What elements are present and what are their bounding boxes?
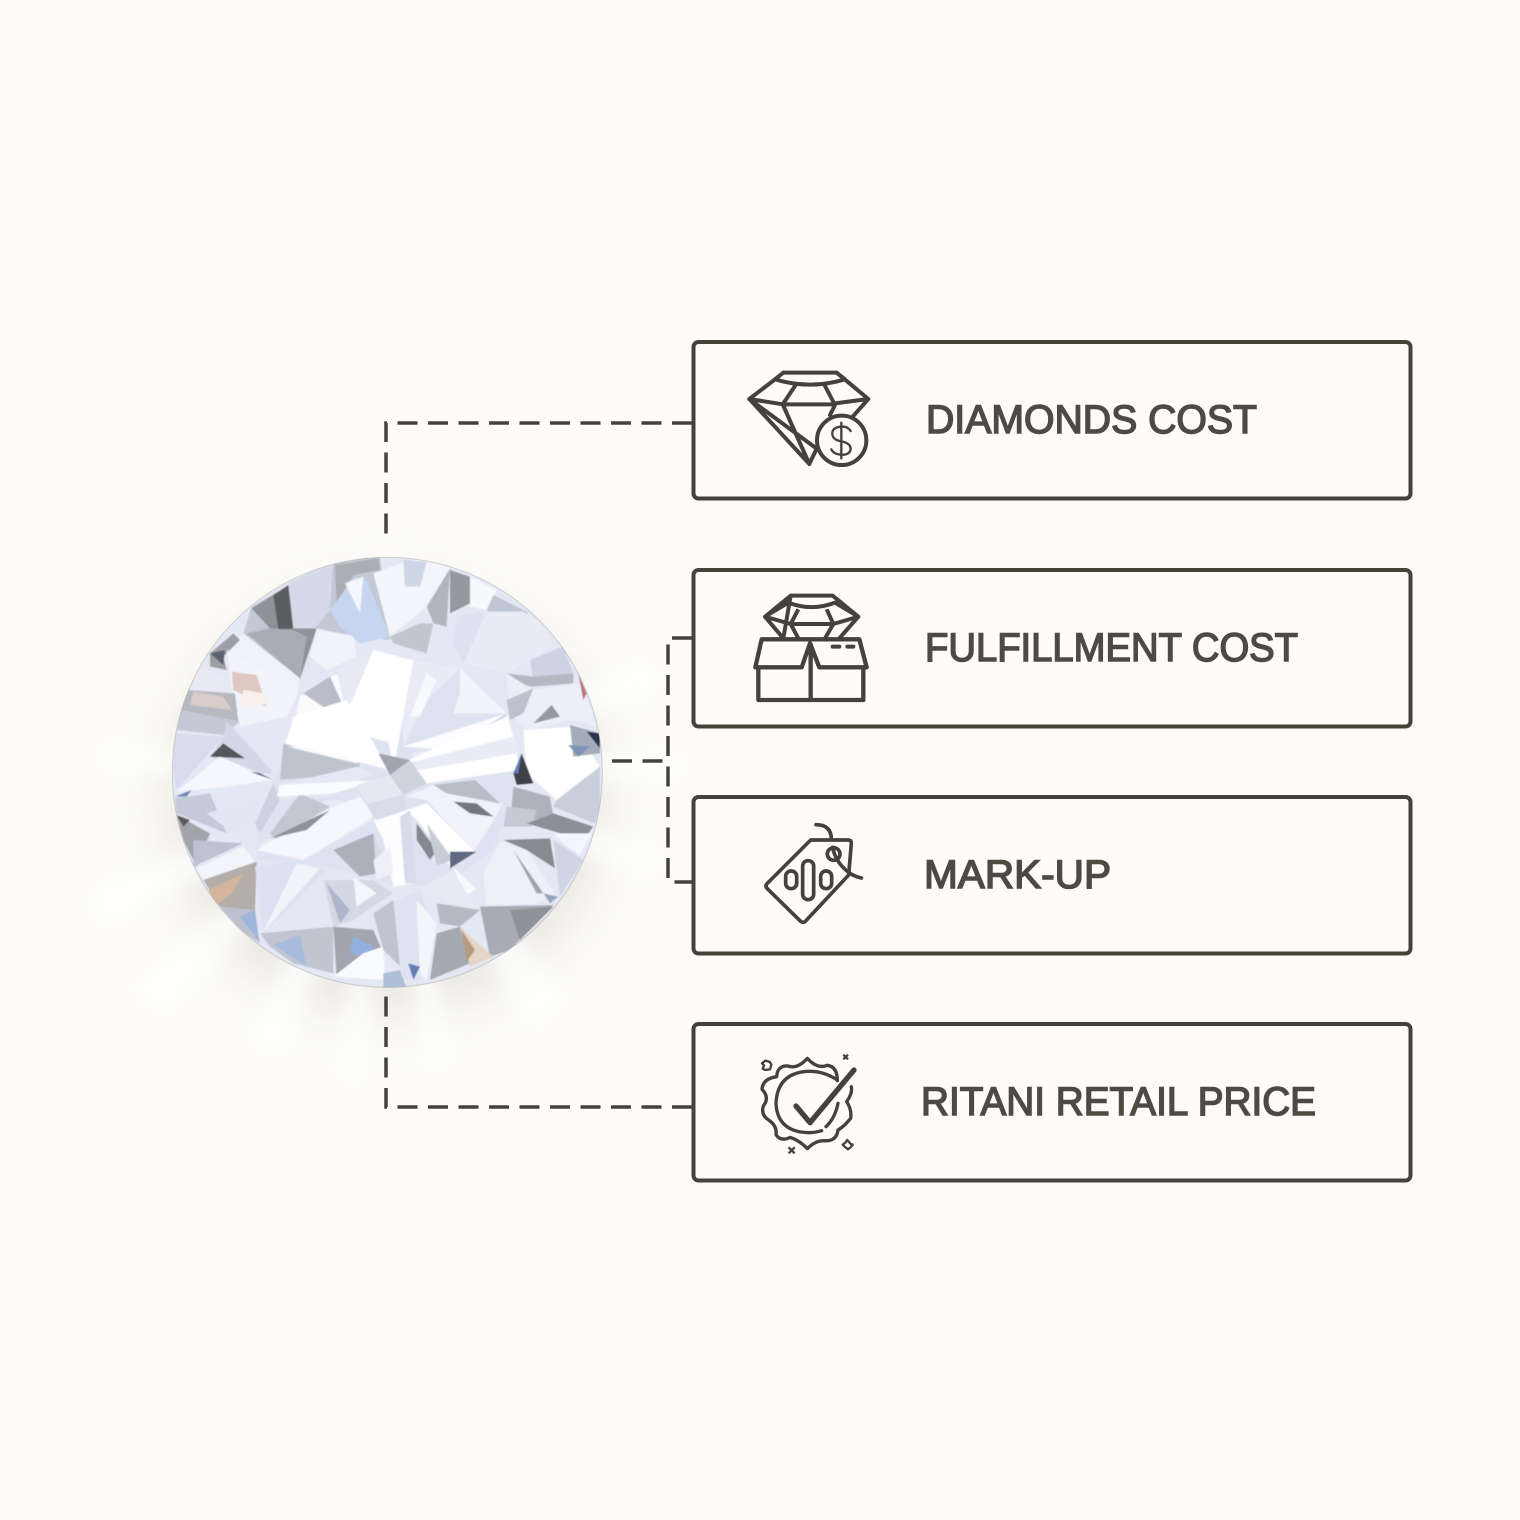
panel: diamonds cost [694, 342, 1410, 498]
icon: price tag [766, 825, 861, 922]
dashed connector: diamonds cost [386, 423, 692, 535]
icon: diamond with dollar coin [749, 373, 868, 465]
panel: Ritani retail price [694, 1024, 1410, 1180]
upper-left facets [173, 628, 307, 943]
right facets [454, 674, 600, 956]
diamond glow and light rays [90, 584, 680, 1080]
table: central star [255, 650, 520, 887]
diamond [172, 557, 602, 988]
label: Ritani retail price: RITANI RETAIL PRICE [921, 1080, 1316, 1124]
icon: quality badge with check [762, 1055, 854, 1153]
panel: mark-up [694, 797, 1410, 954]
bottom facets [255, 860, 493, 988]
dashed connector: fulfillment cost and mark-up [612, 638, 692, 882]
label: mark-up: MARK-UP [924, 853, 1111, 897]
label: diamonds cost: DIAMONDS COST [926, 398, 1257, 442]
icon: diamond in box [755, 596, 867, 700]
panel: fulfillment cost [694, 570, 1410, 726]
crown: upper facets [243, 557, 573, 687]
dashed connector: Ritani retail price [386, 990, 692, 1107]
label: fulfillment cost: FULFILLMENT COST [925, 626, 1298, 670]
